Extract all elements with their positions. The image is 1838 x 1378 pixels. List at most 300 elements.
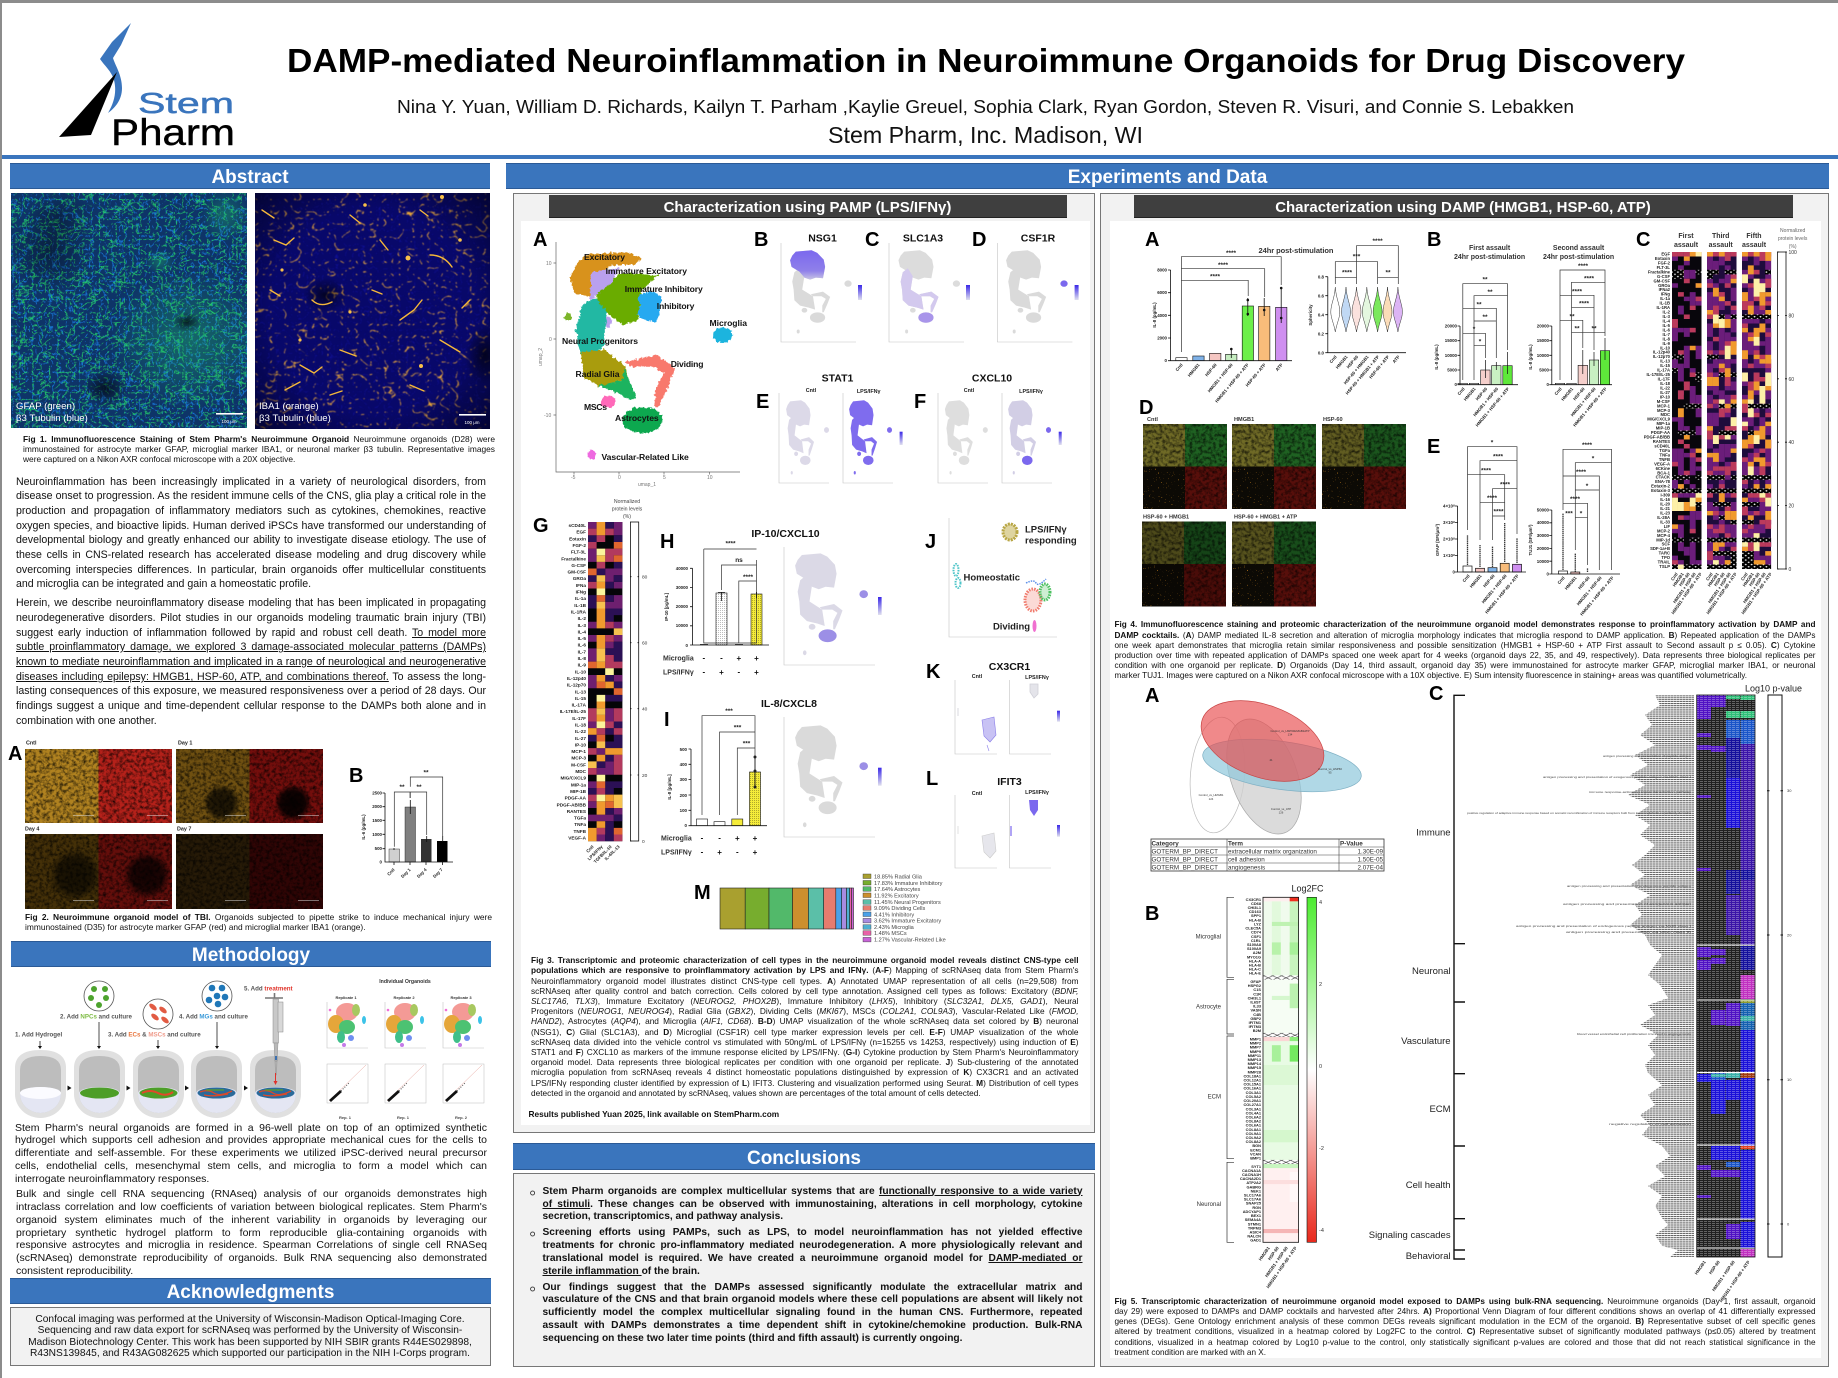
fig 2 caption [25,912,492,932]
fig 4A: IL-8 bars and sphericity violin: ** [1385,269,1390,276]
fig 3H: IP-10 chart: - [702,667,705,676]
fig 5B: Log2FC heatmap: COL9A1 [1245,1130,1261,1135]
fig 4B: repeat assault bars: * [1478,338,1481,345]
fig 5B: Log2FC heatmap: HLA-C [1248,966,1261,971]
fig 5B: Log2FC heatmap: HMGB1 + HSP-60 [1263,1245,1289,1278]
fig 4C: cytokine heatmap over time: TGFa [1659,447,1670,452]
fig 4A: IL-8 bars and sphericity violin: HSP-60 + ATP [1368,354,1390,379]
fig 4C: cytokine heatmap over time: IL-12p40 [1652,349,1670,354]
abstract paragraph 1: disease onset to progression. As the resident immune cells of the CNS, glia play a critical role in the [16,490,486,502]
fig 3G: cytokine heatmap: protein levels [611,506,642,512]
fig 4C: cytokine heatmap over time: IL-28A [1657,514,1670,519]
fig 4C: cytokine heatmap over time: HMGB1 + HSP-60 + ATP [1670,571,1702,615]
fig 4 caption: one week apart demonstrates that microglia retain similar responsiveness and possible sensitization (HMGB1 + HSP-60 + ATP First assault to Second assault p ≤ 0.05). C) Cytokine [1114,640,1816,650]
fig 3I: IL-8 chart: LPS/IFNγ [660,849,691,856]
fig 5B: Log2FC heatmap: COL3A1 [1245,1106,1261,1111]
conclusion bullet 3: Our findings suggest that the DAMPs assessed significantly modulate the extracellular matrix and [542,1282,1082,1292]
fig 4C: cytokine heatmap over time: MCP-4 [1656,532,1670,537]
fig 4E: sum intensity bars: 10000 [1536,558,1549,564]
fig 4C: cytokine heatmap over time: IL-33 [1660,519,1670,524]
fig 3A: annotated UMAP: Immature Inhibitory [624,284,703,294]
fig 3A: annotated UMAP: 0 [548,336,552,342]
acknowledgments box: Sequencing and raw data export for scRNAseq was performed by the University of Wisconsin- [38,1325,462,1336]
fig 5B: Log2FC heatmap: CLEC5A [1245,925,1261,930]
fig 3J: microglia subclusters: J [924,530,936,552]
authors: Nina Y. Yuan, William D. Richards, Kailyn T. Parham ,Kaylie Greuel, Sophia Clark, Ryan Gordon, Steven R. Visuri, and Connie S. Lebakken [397,96,1574,117]
fig 2 panel B: IL-6 bar chart: 1000 [372,832,383,837]
fig 4C: cytokine heatmap over time: assault [1708,242,1733,248]
fig 5 caption: altered by treatment conditions, visualized in a heatmap colored by Log2FC to the control. C) Representative subset of significantly modulated pathways (p≤0.05) altered by treatment [1114,1326,1816,1336]
fig 4C: cytokine heatmap over time: G-CSF [1656,273,1670,278]
fig 3I: IL-8 chart: IL-8 [pg/mL] [666,773,672,799]
fig 4E: sum intensity bars: HMGB1 [1563,575,1578,590]
methodology paragraph 2: organoid system eliminates much of the inherent variability in organoids by leveraging our [16,1214,487,1226]
fig 5 caption: Fig 5. Transcriptomic characterization of neuroimmune organoid model exposed to DAMPs using bulk-RNA sequencing. Neuroimmune organoids (Day 1, first assault, organoid [1114,1296,1816,1306]
fig 4A: IL-8 bars and sphericity violin: Cntl [1328,354,1337,364]
conclusion bullet 1: Stem Pharm organoids are complex multicellular systems that are functionally responsive to a wide variety [542,1186,1082,1196]
abstract paragraph 1: these cells in CNS-related research has accelerated disease modeling and drug discovery while [16,549,486,561]
fig 3E-F: STAT1 and CXCL10 UMAPs: LPS/IFNγ [856,388,880,394]
fig 3H: IP-10 chart: + [719,668,724,676]
fig 4C: cytokine heatmap over time: GROa [1658,282,1670,287]
fig 4C: cytokine heatmap over time: TNFB [1658,456,1670,461]
fig 5B: Log2FC heatmap: CD68 [1251,900,1261,905]
fig 4B: repeat assault bars: IL-8 (pg/mL) [1528,343,1532,369]
fig 3G: cytokine heatmap: MIP-1a [570,782,586,787]
fig 4C: cytokine heatmap over time: IP-10 [1659,394,1670,399]
image: IBA1 and tubulin: 100 μm [464,420,480,425]
fig 4C: cytokine heatmap over time: ENA-78 [1655,479,1670,484]
conclusion bullet 1: of stimuli. These changes can be observed with immunostaining, alterations in cell morphology, cytokine [542,1198,1082,1210]
fig 3G: cytokine heatmap: IL-13 [575,689,586,694]
fig 5A: GO term table: Category [1151,840,1179,847]
fig 3M: cell type distribution: 2.43% Microglia [874,924,914,930]
fig 4A: IL-8 bars and sphericity violin: HSP-60 + HMGB1 + ATP [1344,354,1380,395]
fig 4A: IL-8 bars and sphericity violin: HSP-60 [1345,354,1359,369]
fig 5C: pathway heatmap: Log10 p-value [1744,683,1802,693]
fig 2 panel B: IL-6 bar chart: 2500 [372,790,383,796]
fig 4A: IL-8 bars and sphericity violin: 0.2 [1317,331,1324,336]
methodology paragraph 2: (scRNAseq) demonstrate reproducibility of organoids. Bulk RNA sequencing also demonstrated [16,1252,487,1264]
fig 3 caption: scRNAseq data divided into the vehicle control vs stimulated with 50ng/mL of LPS/IFNγ (n=15255 vs 14253, respectively) using induction of E) [531,1036,1078,1046]
abstract paragraph 2: diseases including epilepsy: HMGB1, HSP-60, ATP, and combinations thereof. To assess the long- [16,671,486,683]
fig 4B: repeat assault bars: 0 [1546,382,1549,386]
fig 3G: cytokine heatmap: TGFB/IL-10 [592,843,613,864]
panel: DAMP characterization [1100,193,1829,1367]
conclusion bullet 2: treatments for chronic pro-inflammatory mediated neurodegeneration. A more physiologically relevant and [542,1240,1082,1250]
fig 3I: IL-8 chart: 100 [679,808,687,812]
fig 5B: Log2FC heatmap: CHI3L1 [1247,905,1261,910]
fig 4C: cytokine heatmap over time: MCP-2 [1656,528,1670,533]
fig 4E: sum intensity bars: * [1490,439,1493,446]
fig 5A: GO term table: P-Value [1340,840,1363,847]
methodology paragraph 1: cells, endothelial cells, mesenchymal stem cells, and microglia to form a model which can [15,1160,487,1172]
image: GFAP and tubulin fibres: GFAP (green) [16,401,75,412]
panel heading: DAMP [1134,194,1792,218]
fig 3G: cytokine heatmap: (%) [622,514,631,520]
fig 4C: cytokine heatmap over time: First [1678,232,1694,240]
fig 3L: IFIT3: Cntl [971,790,982,796]
fig 5B: Log2FC heatmap: COL6A1 [1245,1122,1261,1127]
fig 4C: cytokine heatmap over time: FLT-3L [1656,264,1670,269]
fig 2 panel A: injury images: Day 4 [25,826,39,832]
fig 4D: immunofluorescence grid: HSP-60 + HMGB1 [1142,514,1189,520]
fig 3H: IP-10 chart: H [660,530,674,552]
fig 5B: Log2FC heatmap: MMP11 [1247,1052,1261,1057]
fig 4C: cytokine heatmap over time: IL-6 [1662,327,1670,332]
image: IBA1 and tubulin: β3 Tubulin (blue) [259,413,331,424]
fig 2 panel B: IL-6 bar chart: Day 7 [432,867,444,879]
fig 3G: cytokine heatmap: IL-27 [575,735,586,740]
fig 3G: cytokine heatmap: LPS/IFNγ [586,843,604,861]
fig 3 caption: microglia population from scRNAseq reveals 4 distinct homeostatic populations distinguished by expression of K) CX3CR1 and an activated [531,1066,1078,1076]
fig 5 caption: day 29) were exposed to DAMPs and DAMP cocktails and harvested after 24hrs. A) Proportional Venn Diagram of four different conditions shows an overlap of 41 differentially expressed [1114,1306,1816,1316]
fig 4B: repeat assault bars: **** [1583,275,1594,282]
fig 3I: IL-8 chart: - [700,847,703,856]
fig 4C: cytokine heatmap over time: IL-5 [1662,322,1670,327]
fig 3L: IFIT3: IFIT3 [997,776,1021,788]
fig 3J: microglia subclusters: Homeostatic [963,572,1020,583]
fig 3G: cytokine heatmap: TNFB [573,828,586,833]
individual organoid replicate plots: Rep. 1 [339,1115,352,1120]
fig 4C: cytokine heatmap over time: IL-7 [1662,331,1670,336]
fig 4B: repeat assault bars: 10000 [1536,352,1549,358]
fig 5C: pathway heatmap: antigen processing and presentation of exogenous peptide antigen via MHC class I [1542,774,1691,778]
organoid well workflow [15,981,301,1118]
fig 5B: Log2FC heatmap: BMP1 [1250,1155,1261,1160]
abstract paragraph 1: production and propagation of inflammatory mediators such as cytokines, chemokines, reactive [16,505,486,517]
fig 3J: microglia subclusters [924,518,1076,636]
fig 4E: sum intensity bars: HSP-60 [1577,575,1591,590]
fig 4C: cytokine heatmap over time: Cntl [1739,571,1748,581]
fig 3K: CX3CR1: K [926,660,940,682]
fig 5B: Log2FC heatmap: GABRG [1246,1184,1260,1189]
fig 4C: cytokine heatmap over time: TARC [1658,550,1670,555]
fig 4B: repeat assault bars: HMGB1 [1462,386,1477,401]
fig 5B: Log2FC heatmap: SPP1 [1251,913,1261,918]
fig 3A: annotated UMAP: -5 [570,474,575,480]
acknowledgments box [10,1307,491,1366]
fig 4D: immunofluorescence grid: HSP-60 + HMGB1 + ATP [1234,514,1297,520]
fig 5A: Venn diagram [1144,684,1364,844]
fig 3I: IL-8 chart: IL-8/CXCL8 [760,698,817,710]
fig 3H: IP-10 chart: 10000 [675,622,688,628]
fig 3I: IL-8 chart: 200 [679,792,687,798]
fig 3A: annotated UMAP: A [532,228,547,250]
fig 4A: IL-8 bars and sphericity violin: 2000 [1157,335,1167,340]
fig 4E: sum intensity bars: HMGB1 [1468,573,1483,588]
fig 3G: cytokine heatmap: IL-9 [577,662,586,667]
fig 3G: cytokine heatmap: IL-12p70 [566,682,586,687]
individual organoid replicate plots: Replicate 1 [335,995,357,1000]
panel heading: DAMP: Characterization using DAMP (HMGB1, HSP-60, ATP) [1275,198,1651,216]
fig 3 caption: (NSG1), C) Glial (SLC1A3), and D) Microglial (CSF1R) cell type marker expression levels per cell. E-F) UMAP visualization of the whole [531,1026,1079,1036]
image: IBA1 and tubulin: IBA1 (orange) [259,401,319,412]
fig 4B: repeat assault bars: ** [1482,314,1487,320]
fig 5A: GO term table: GOTERM_BP_DIRECT [1151,864,1218,871]
conclusion bullet 1: secretion, transcriptomics, and pathway analysis. [542,1210,783,1222]
fig 4C: cytokine heatmap over time: BCA-1 [1657,470,1670,475]
fig 4E: sum intensity bars: TUJ1 (SFI/μm³) [1528,523,1532,555]
fig 4A: IL-8 bars and sphericity violin: **** [1217,262,1228,268]
fig 5C: pathway heatmap: C [1428,682,1443,704]
fig 5 caption: treatment condition are marked with an X. [1114,1348,1266,1356]
fig 5B: Log2FC heatmap: CD163 [1248,909,1261,914]
fig 4C: cytokine heatmap over time: Third [1711,232,1729,240]
acknowledgments box: Madison Biotechnology Center. This work has been supported by NIH SBIR grants R44ES029898, [28,1337,472,1348]
fig 5C: pathway heatmap: antigen processing and presentation of exogenous antigen [1562,902,1691,906]
fig 4C: cytokine heatmap over time: 6CKine [1655,465,1670,470]
fig 5B: Log2FC heatmap: SYT1 [1251,1163,1261,1168]
fig 5B: Log2FC heatmap: SEMA4A [1244,1217,1261,1222]
fig 5B: Log2FC heatmap: RGN [1252,1204,1261,1209]
fig 4E: sum intensity bars: 3×10⁸ [1443,520,1454,524]
fig 5B: Log2FC heatmap: CACNA1A [1241,1167,1261,1172]
fig 3H: IP-10 chart: 30000 [675,584,688,590]
fig 5C: pathway heatmap: 10 [1786,1076,1792,1082]
fig 5A: GO term table: GOTERM_BP_DIRECT [1151,856,1218,863]
fig 4C: cytokine heatmap over time: HSP-60 [1677,571,1691,587]
fig 3 caption: Fig 3. Transcriptomic and proteomic characterization of cell types in the neuroimmune organoid model reveals distinct CNS-type cell [531,954,1078,964]
fig 2 panel B: IL-6 bar chart [349,765,453,879]
fig 5B: Log2FC heatmap: NALCN [1247,1233,1261,1238]
fig 3G: cytokine heatmap: TNFa [574,822,586,827]
fig 3E-F: STAT1 and CXCL10 UMAPs: STAT1 [821,372,853,384]
panel: conclusions [513,1173,1095,1367]
bullet markers [530,1190,534,1290]
fig 4B: repeat assault bars: 24hr post-stimulation [1454,254,1525,260]
fig 5C: pathway heatmap: HMGB1 [1693,1259,1707,1275]
fig 3A: annotated UMAP: Radial Glia [575,368,619,378]
fig 4C: cytokine heatmap over time: IL-1RA [1656,305,1670,310]
fig 4B: repeat assault bars: Cntl [1553,386,1562,396]
fig 4E: sum intensity bars: **** [1575,468,1586,476]
fig 5C: pathway heatmap: Behavioral [1405,1250,1450,1262]
fig 4C: cytokine heatmap over time: GM-CSF [1653,278,1670,283]
fig 3G: cytokine heatmap: IFNg [575,589,586,594]
fig 4E: sum intensity bars: **** [1493,508,1504,515]
fig 5B: Log2FC heatmap: SLC17A6 [1243,1192,1261,1197]
fig 1 caption: were captured on a Nikon AXR confocal microscope with a 20X objective. [23,454,295,464]
fig 3A: annotated UMAP: Microglia [709,318,747,328]
fig 5B: Log2FC heatmap: 0 [1318,1064,1322,1070]
fig 4C: cytokine heatmap over time: IL-8 [1662,336,1670,341]
fig 4 caption: production over time with repeated application of DAMPs spaced one week apart for 4 weeks (organoid days 22, 35, and 49, respectively). Data represents three biological replicates per [1114,650,1816,660]
fig 5B: Log2FC heatmap: COL6A2 [1245,1114,1261,1119]
methodology paragraph 2: intraclass correlation and low coefficients of variation between biological replicates. Stem Pharm's [16,1201,487,1213]
fig 5B: Log2FC heatmap: VASN [1250,1007,1261,1012]
fig 4E: sum intensity bars: 4×10⁸ [1443,503,1454,508]
fig 3I: IL-8 chart: 300 [679,776,687,782]
fig 3G: cytokine heatmap: RANTES [566,808,586,813]
affiliation: Stem Pharm, Inc. Madison, WI [828,122,1143,148]
fig 5B: Log2FC heatmap: HSP-60 [1266,1245,1280,1261]
conclusion bullet 3: sequencing on these two later time points (third and fifth assault) is currently ongoing. [542,1332,962,1344]
fig 5B: Log2FC heatmap: ADCYAP1 [1242,1208,1261,1213]
icon: pipette [265,993,283,1085]
fig 3 caption: STAT1 and F) CXCL10 as markers of the immune response elicited by LPS/IFNγ. (G-I) Cytokine production by Stem Pharm's Neuroinflammatory [531,1046,1078,1056]
title: DAMP-mediated Neuroinflammation in Neuroimmune Organoids for Drug Discovery [287,43,1685,80]
fig 4C: cytokine heatmap over time: Cntl [1669,571,1678,581]
fig 3I: IL-8 chart: - [735,847,738,856]
fig 5B: Log2FC heatmap: MYO1G [1246,954,1260,959]
fig 4C: cytokine heatmap over time: M-CSF [1656,398,1670,403]
fig 3G: cytokine heatmap: IL-4/IL-13 [603,843,621,861]
fig 4C: cytokine heatmap over time: MIP-1B [1655,425,1670,430]
fig 5B: Log2FC heatmap: STMN1 [1247,1221,1261,1226]
fig 4C: cytokine heatmap over time: Cntl [1704,571,1713,581]
fig 3G: cytokine heatmap: VEGF-A [568,835,586,840]
fig 5B: Log2FC heatmap: Astrocyte [1195,1004,1221,1010]
fig 5C: pathway heatmap: Signaling cascades [1368,1230,1450,1240]
heading: Acknowledgments [10,1278,491,1304]
fig 3G: cytokine heatmap: MIP-1B [570,788,586,793]
fig 5C: pathway heatmap: positive regulation of adaptive immune response based on somatic recombination of immune receptors built from immunoglobulin superfamily domains [1466,810,1691,814]
abstract paragraph 2: combination with one another. [16,715,157,727]
fig 3G: cytokine heatmap: TGFa [574,815,586,820]
fig 2 panel A: injury images [8,740,323,909]
fig 5 caption: conditions, visualized in a heatmap colored by Log10 p-value to the control, only statistically significant p-values are colored and those that did not reach statistical significance in the [1114,1338,1816,1346]
fig 3H: IP-10 chart: + [736,654,741,662]
abstract paragraph 2: findings suggest a unique and time-dependent cellular response to the DAMPs both alone and in [16,700,486,712]
fig 3A: annotated UMAP: MSCs [584,402,607,412]
fig 4A: IL-8 bars and sphericity violin: 0.4 [1317,312,1324,317]
fig 5 caption: genes (DEGs). Gene Ontology enrichment analysis of these common DEGs reveals significant modulation in the ECM of the organoid. B) Representative subset of cell specific genes [1114,1316,1816,1326]
fig 5B: Log2FC heatmap: C4B [1253,1011,1261,1016]
fig 3J: microglia subclusters: Dividing [992,621,1030,632]
fig 3I: IL-8 chart: *** [733,724,741,731]
fig 4E: sum intensity bars: HSP-60 [1482,573,1496,588]
fig 5B: Log2FC heatmap: -4 [1318,1228,1323,1234]
organoid well workflow: 5. Add treatment [244,986,293,992]
fig 4C: cytokine heatmap over time: IL-23 [1660,510,1670,515]
methodology paragraph 2: responsive astrocytes and microglia in residence. Spearman Correlations of single cell RNASeq [16,1239,487,1251]
fig 5A: Venn diagram: 134 [1287,732,1292,736]
fig 4E: sum intensity bars: 30000 [1536,532,1549,538]
fig 3H: IP-10 chart: 0 [685,642,688,648]
fig 3 caption [531,954,1079,1098]
fig 4C: cytokine heatmap over time: MIP-1d [1656,537,1670,542]
fig 3H: IP-10 chart: **** [742,574,753,580]
fig 3G: cytokine heatmap: IL-2 [577,616,586,621]
fig 4E: sum intensity bars: **** [1581,442,1592,448]
fig 4B: repeat assault bars: HMGB1 + HSP-60 + ATP [1572,386,1607,427]
header [59,23,1685,153]
fig 3B-D: marker UMAPs: SLC1A3 [902,232,943,244]
organoid well workflow: 3. Add ECs & MSCs and culture [108,1032,201,1038]
fig 4B: repeat assault bars: 15000 [1444,338,1457,342]
fig 3 caption: LPS/IFNγ responding cluster identified by expression of L) IFIT3. Clustering and visualization performed using Seurat. M) Distribution of cell types [531,1078,1078,1088]
fig 3G: cytokine heatmap: 0 [642,838,644,844]
fig 3G: cytokine heatmap: Cntl [585,844,594,853]
fig 4C: cytokine heatmap over time: C [1636,228,1650,250]
fig 3I: IL-8 chart: - [718,833,721,842]
fig 4C: cytokine heatmap over time: CTACK [1655,474,1670,479]
fig 1 caption [23,434,495,464]
fig 3G: cytokine heatmap: IL-4 [577,629,586,634]
fig 4A: IL-8 bars and sphericity violin: HSP-60 + ATP [1244,362,1266,387]
individual organoid replicate plots: Individual Organoids [379,979,431,985]
fig 3I: IL-8 chart: 400 [679,762,687,766]
fig 4E: sum intensity bars: **** [1480,467,1491,474]
organoid well workflow: 2. Add NPCs and culture [60,1014,133,1020]
fig 5B: Log2FC heatmap: CSF1 [1251,933,1261,938]
fig 4A: IL-8 bars and sphericity violin: HMGB1 + HSP-60 + ATP [1214,362,1249,403]
image: GFAP and tubulin fibres: β3 Tubulin (blue) [16,413,88,424]
fig 3G: cytokine heatmap: MCP-3 [571,755,586,760]
fig 3A: annotated UMAP: Neural Progenitors [562,336,638,346]
fig 5B: Log2FC heatmap: COL8A2 [1245,1118,1261,1123]
fig 5B: Log2FC heatmap: 2 [1318,982,1322,988]
fig 4C: cytokine heatmap over time: 80 [1788,313,1794,319]
fig 3G: cytokine heatmap: PDGF-AB/BB [556,802,586,807]
fig 4E: sum intensity bars: * [1585,482,1588,490]
fig 4C: cytokine heatmap over time: IL-12p70 [1652,354,1670,359]
logo: Stem Pharm: Pharm [111,112,235,153]
heading: Methodology [11,941,491,967]
fig 4C: cytokine heatmap over time: VEGF-A [1654,461,1670,466]
fig 5A: GO term table: cell adhesion [1228,856,1265,863]
fig 5C: pathway heatmap [1368,682,1802,1303]
fig 3H: IP-10 chart: LPS/IFNγ [662,669,693,676]
fig 4C: cytokine heatmap over time: Eotaxin-2 [1651,483,1670,488]
fig 4E: sum intensity bars: HMGB1 + HSP-60 + ATP [1484,573,1519,614]
fig 5C: pathway heatmap: antigen processing and presentation via MHC class Ib [1566,930,1691,934]
fig 5B: Log2FC heatmap: COL15A1 [1243,1081,1261,1086]
fig 5C: pathway heatmap: antigen processing and presentation of endogenous peptide antigen [1566,884,1691,888]
fig 4C: cytokine heatmap over time: IL-1a [1660,296,1670,301]
fig 5A: GO term table: 1.30E-09 [1357,848,1383,855]
fig 3G: cytokine heatmap: IL-1B [574,602,586,607]
fig 3A: annotated UMAP: Vascular-Related Like [601,452,689,462]
fig 4C: cytokine heatmap over time: 60 [1788,376,1794,382]
fig 3G: cytokine heatmap: G-CSF [571,562,586,567]
fig 5B: Log2FC heatmap: COL3A1 [1245,1089,1261,1094]
fig 4E: sum intensity bars [1426,436,1620,616]
fig 5B: Log2FC heatmap: MMP28 [1247,1069,1261,1074]
abstract paragraph 2: neurodegenerative disorders. Pilot studies in our organoids modeling traumatic brain injury (TBI) [16,612,486,624]
fig 3M: cell type distribution [694,874,945,943]
fig 4C: cytokine heatmap over time: HMGB1 [1741,571,1755,587]
individual organoid replicate plots [327,979,484,1120]
fig 2 panel B: IL-6 bar chart: Day 1 [400,867,412,879]
fig 3 caption: detected in the organoid and annotated by scRNAseq, values shown are percentages of the total amount of cells detected. [531,1088,981,1098]
heading: Methodology: Methodology [192,945,310,966]
fig 4C: cytokine heatmap over time: IL-4 [1662,318,1670,323]
fig 5B: Log2FC heatmap: COL9A2 [1245,1135,1261,1140]
logo: Stem Pharm: Stem [138,88,234,120]
fig 2 panel B: IL-6 bar chart: B [349,765,363,787]
fig 3K: CX3CR1: LPS/IFNγ [1025,674,1048,680]
fig 5B: Log2FC heatmap: CACNA2D1 [1239,1176,1261,1181]
fig 5B: Log2FC heatmap: MMP14 [1247,1061,1261,1066]
heading: Acknowledgments: Acknowledgments [167,1282,334,1303]
fig 5B: Log2FC heatmap: ECM [1207,1094,1220,1100]
image: GFAP and tubulin fibres: 100 μm [221,419,237,424]
fig 5C: pathway heatmap: antigen processing and presentation of endogenous peptide antigen via MHC class I [1516,924,1691,928]
fig 4C: cytokine heatmap over time: IL-17A [1657,367,1670,372]
fig 4A: IL-8 bars and sphericity violin: **** [1225,250,1236,256]
fig 3J: microglia subclusters: LPS/IFNγ [1024,524,1067,535]
fig 3I: IL-8 chart: + [717,848,722,856]
methodology paragraph 2: proprietary synthetic hydrogel platform to form reproducible glia-containing organoids with [16,1227,487,1239]
fig 5B: Log2FC heatmap: MMP9 [1249,1048,1261,1053]
abstract paragraph 2: suggest early induction of inflammation followed by rapid and robust cell death. To model more [16,627,486,639]
abstract paragraph 1: oxygen species, and bioactive lipids. Human derived iPSCs have transformed our understanding of [16,520,486,532]
heading: Experiments and Data [506,163,1829,189]
fig 3E-F: STAT1 and CXCL10 UMAPs: CXCL10 [971,372,1012,384]
fig 5B: Log2FC heatmap: IL6ST [1250,999,1261,1004]
